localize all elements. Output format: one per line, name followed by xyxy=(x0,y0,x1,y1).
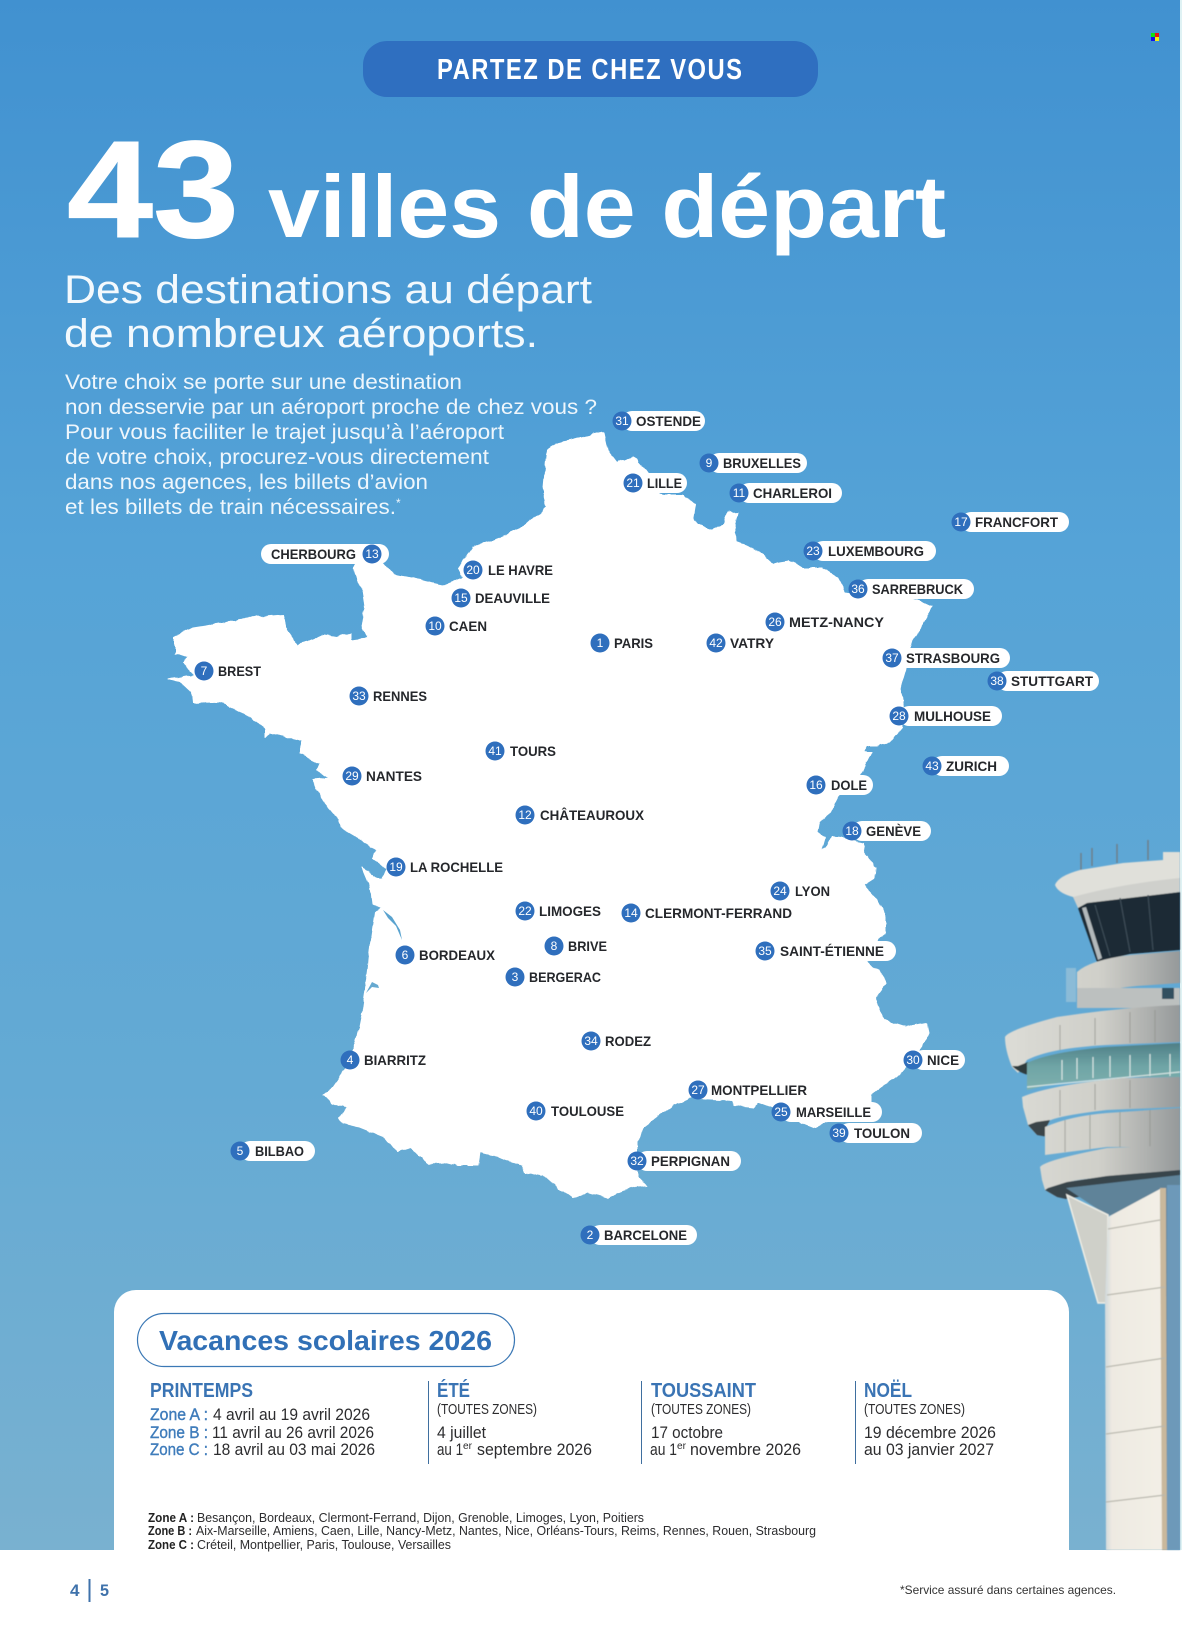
column: printemps: 4 avril au 19 avril 2026 xyxy=(213,1405,370,1424)
city label: Marseille: 25 xyxy=(774,1105,788,1119)
column: noël: au 03 janvier 2027 xyxy=(864,1440,994,1459)
city label: Strasbourg: STRASBOURG xyxy=(906,650,1000,666)
city label: Nantes: NANTES xyxy=(366,768,422,784)
city label: Cherbourg: CHERBOURG xyxy=(271,546,356,562)
city label: Toulon: TOULON xyxy=(854,1125,910,1141)
city label: Rennes: 33 xyxy=(352,689,366,703)
column: printemps: Zone B : xyxy=(150,1423,208,1442)
city label: Zurich xyxy=(922,756,1009,776)
city label: Luxembourg: LUXEMBOURG xyxy=(828,543,924,559)
column: toussaint: 17 octobre xyxy=(651,1423,723,1442)
city label: Strasbourg: 37 xyxy=(885,651,899,665)
city label: Dole: 16 xyxy=(809,778,823,792)
intro text block: de votre choix, procurez-vous directement xyxy=(65,446,489,469)
page numbers: 4 xyxy=(70,1581,80,1600)
city label: Sarrebruck xyxy=(848,579,974,599)
page numbers xyxy=(70,1579,109,1602)
title xyxy=(67,113,946,267)
city label: Tours: 41 xyxy=(488,744,502,758)
city label: Charleroi xyxy=(730,483,842,503)
city label: Montpellier xyxy=(688,1080,807,1100)
column: été: ÉTÉ xyxy=(437,1379,470,1402)
city label: Genève: 18 xyxy=(845,824,859,838)
city label: Barcelone xyxy=(580,1225,697,1245)
city label: Saint-Étienne xyxy=(756,941,896,961)
city label: Brive: 8 xyxy=(551,939,558,953)
city label: La Rochelle: 19 xyxy=(389,860,403,874)
column: printemps: PRINTEMPS xyxy=(150,1380,253,1402)
city label: Bordeaux: 6 xyxy=(402,948,409,962)
column: toussaint xyxy=(641,1380,801,1464)
zone city list: Zone B : xyxy=(148,1523,192,1538)
column: printemps: 11 avril au 26 avril 2026 xyxy=(212,1423,374,1442)
city label: Charleroi: 11 xyxy=(733,486,746,500)
column: toussaint: novembre 2026 xyxy=(690,1440,801,1459)
city label: Biarritz xyxy=(340,1050,426,1070)
city label: Vatry: VATRY xyxy=(730,635,775,651)
city label: Barcelone: 2 xyxy=(587,1228,594,1242)
heading: vacances scolaires 2026 xyxy=(138,1314,514,1366)
city label: Dole: DOLE xyxy=(831,777,867,793)
city label: Rodez: 34 xyxy=(584,1034,598,1048)
column: noël: 19 décembre 2026 xyxy=(864,1423,996,1442)
city label: Ostende xyxy=(612,411,705,431)
city label: Nice: 30 xyxy=(906,1053,920,1067)
city label: Montpellier: MONTPELLIER xyxy=(711,1082,807,1098)
subtitle xyxy=(64,268,592,356)
city label: Francfort: FRANCFORT xyxy=(975,514,1058,530)
city label: Ostende: OSTENDE xyxy=(636,413,701,429)
city label: Nantes: 29 xyxy=(345,769,359,783)
city label: Biarritz: 4 xyxy=(347,1053,354,1067)
city label: Châteauroux: 12 xyxy=(518,808,532,822)
city label: Stuttgart: STUTTGART xyxy=(1011,673,1093,689)
footnote: *Service assuré dans certaines agences. xyxy=(900,1583,1116,1597)
city label: Brive: BRIVE xyxy=(568,938,607,954)
city label: Paris xyxy=(590,634,653,652)
zone city list: Aix-Marseille, Amiens, Caen, Lille, Nancy-Metz, Nantes, Nice, Orléans-Tours, Reims, Rennes, Rouen, Strasbourg xyxy=(196,1523,816,1538)
column: toussaint: er xyxy=(677,1441,687,1452)
city label: Brest: 7 xyxy=(201,664,208,678)
city label: Brive xyxy=(544,936,607,956)
city label: Ostende: 31 xyxy=(615,414,629,428)
column: noël: (TOUTES ZONES) xyxy=(864,1402,965,1418)
heading pill: partez de chez vous xyxy=(363,41,818,97)
column: noël xyxy=(855,1379,996,1464)
city label: Brest xyxy=(194,662,261,680)
city label: Zurich: 43 xyxy=(925,759,939,773)
column: été: 4 juillet xyxy=(437,1423,486,1442)
city label: Bruxelles: 9 xyxy=(706,456,713,470)
column: toussaint: TOUSSAINT xyxy=(651,1380,756,1402)
city label: Lyon xyxy=(770,882,830,900)
city label: Mulhouse xyxy=(890,706,1002,726)
icon: colour marker xyxy=(1151,33,1159,41)
city label: Francfort: 17 xyxy=(954,515,968,529)
zone city list: Besançon, Bordeaux, Clermont-Ferrand, Dijon, Grenoble, Limoges, Lyon, Poitiers xyxy=(197,1510,644,1525)
city label: Perpignan: PERPIGNAN xyxy=(651,1153,730,1169)
column: toussaint: au 1 xyxy=(650,1440,677,1459)
city label: Le Havre: LE HAVRE xyxy=(488,562,553,578)
subtitle: de nombreux aéroports. xyxy=(64,312,538,356)
city label: Châteauroux xyxy=(516,806,645,824)
city label: Lyon: LYON xyxy=(795,883,830,899)
city label: Châteauroux: CHÂTEAUROUX xyxy=(540,806,645,823)
control tower xyxy=(1005,840,1180,1550)
city label: Sarrebruck: 36 xyxy=(851,582,865,596)
intro text block: * xyxy=(396,496,401,510)
zone city list: Zone A : xyxy=(148,1510,194,1525)
city label: Brest: BREST xyxy=(218,663,261,679)
intro text block: non desservie par un aéroport proche de chez vous ? xyxy=(65,396,597,419)
city label: Stuttgart: 38 xyxy=(990,674,1004,688)
city label: Bilbao: BILBAO xyxy=(255,1143,304,1159)
city label: Toulon: 39 xyxy=(832,1126,846,1140)
city label: Lille: LILLE xyxy=(647,475,682,491)
city label: Toulon xyxy=(830,1123,922,1143)
city label: Rennes xyxy=(350,686,427,706)
city label: Barcelone: BARCELONE xyxy=(604,1227,687,1243)
city label: Paris: PARIS xyxy=(614,635,653,651)
city label: Genève xyxy=(842,821,931,841)
city label: Saint-Étienne: 35 xyxy=(758,944,772,958)
heading pill: partez de chez vous: PARTEZ DE CHEZ VOUS xyxy=(437,53,742,86)
city label: Dole xyxy=(806,775,873,795)
city label: Rennes: RENNES xyxy=(373,688,427,704)
column: printemps: 18 avril au 03 mai 2026 xyxy=(213,1440,375,1459)
city label: Caen: CAEN xyxy=(449,618,487,634)
city label: Mulhouse: MULHOUSE xyxy=(914,708,991,724)
intro text block: Pour vous faciliter le trajet jusqu’à l’aéroport xyxy=(65,421,504,444)
city label: Zurich: ZURICH xyxy=(946,758,997,774)
city label: Marseille: MARSEILLE xyxy=(796,1104,871,1120)
city label: Perpignan xyxy=(628,1151,741,1171)
city label: Stuttgart xyxy=(988,671,1099,691)
city label: Luxembourg xyxy=(804,541,936,561)
city label: Genève: GENÈVE xyxy=(866,823,921,839)
city label: Toulouse xyxy=(526,1102,624,1120)
city label: Le Havre: 20 xyxy=(466,563,480,577)
city label: Tours: TOURS xyxy=(510,743,556,759)
column: noël: NOËL xyxy=(864,1379,912,1402)
city label: Clermont-Ferrand: CLERMONT-FERRAND xyxy=(645,905,792,921)
city label: Francfort xyxy=(952,512,1069,532)
map of France xyxy=(168,432,932,1198)
column: été: (TOUTES ZONES) xyxy=(437,1402,537,1418)
column: printemps: Zone C : xyxy=(150,1440,208,1459)
city label: Bruxelles: BRUXELLES xyxy=(723,455,801,471)
city label: Limoges: 22 xyxy=(518,904,532,918)
city label: Deauville xyxy=(452,588,550,608)
intro text block: Votre choix se porte sur une destination xyxy=(65,371,462,394)
city label: Bilbao xyxy=(230,1141,315,1161)
city label: Caen xyxy=(426,616,487,636)
column: toussaint: (TOUTES ZONES) xyxy=(651,1402,751,1418)
city label: Vatry: 42 xyxy=(709,636,723,650)
city label: Charleroi: CHARLEROI xyxy=(753,485,832,501)
city label: Toulouse: TOULOUSE xyxy=(551,1103,624,1119)
city label: Lille xyxy=(624,473,687,493)
city label: Paris: 1 xyxy=(597,636,604,650)
city label: Deauville: 15 xyxy=(454,591,468,605)
city label: La Rochelle: LA ROCHELLE xyxy=(410,859,503,875)
page numbers: 5 xyxy=(100,1581,109,1600)
city label: Nice: NICE xyxy=(927,1052,959,1068)
city label: Bergerac: BERGERAC xyxy=(529,969,601,985)
city label: Saint-Étienne: SAINT-ÉTIENNE xyxy=(780,943,884,959)
column: printemps xyxy=(150,1380,375,1459)
city label: Cherbourg xyxy=(261,544,389,564)
intro text block: dans nos agences, les billets d’avion xyxy=(65,471,428,494)
column: été xyxy=(428,1379,592,1464)
city label: Bilbao: 5 xyxy=(237,1144,244,1158)
column: été: er xyxy=(463,1441,473,1452)
city label: Toulouse: 40 xyxy=(529,1104,543,1118)
column: printemps: Zone A : xyxy=(150,1405,208,1424)
city label: Rodez xyxy=(582,1032,651,1050)
city label: Cherbourg: 13 xyxy=(365,547,379,561)
title: villes de départ xyxy=(268,157,946,256)
city label: Perpignan: 32 xyxy=(630,1154,644,1168)
city label: Metz-Nancy: METZ-NANCY xyxy=(789,614,885,630)
city label: Tours xyxy=(486,742,556,760)
city label: Lyon: 24 xyxy=(773,884,787,898)
city label: Limoges xyxy=(516,902,601,920)
city label: Lille: 21 xyxy=(626,476,640,490)
city label: Clermont-Ferrand: 14 xyxy=(624,906,638,920)
heading: vacances scolaires 2026: Vacances scolaires 2026 xyxy=(159,1325,492,1356)
city label: Deauville: DEAUVILLE xyxy=(475,590,550,606)
city label: La Rochelle xyxy=(386,858,503,876)
city label: Montpellier: 27 xyxy=(691,1083,705,1097)
column: été: au 1 xyxy=(437,1440,463,1459)
city label: Bergerac: 3 xyxy=(512,970,519,984)
city label: Le Havre xyxy=(464,560,553,580)
intro text block: et les billets de train nécessaires. xyxy=(65,496,396,519)
city label: Caen: 10 xyxy=(428,619,442,633)
zone city list: Zone C : xyxy=(148,1537,194,1552)
city label: Bruxelles xyxy=(700,453,807,473)
city label: Bergerac xyxy=(506,968,601,986)
city label: Nantes xyxy=(342,766,422,786)
city label: Metz-Nancy xyxy=(766,612,885,632)
zone city list xyxy=(148,1510,816,1552)
zone city list: Créteil, Montpellier, Paris, Toulouse, Versailles xyxy=(197,1537,451,1552)
city label: Sarrebruck: SARREBRUCK xyxy=(872,581,963,597)
city label: Metz-Nancy: 26 xyxy=(768,615,782,629)
title: 43 xyxy=(67,113,239,267)
city label: Marseille xyxy=(772,1102,882,1122)
panel: school holidays xyxy=(114,1290,1069,1552)
city label: Mulhouse: 28 xyxy=(892,709,906,723)
column: été: septembre 2026 xyxy=(477,1440,592,1459)
intro text block xyxy=(65,371,597,519)
city label: Vatry xyxy=(706,634,775,652)
city label: Rodez: RODEZ xyxy=(605,1033,651,1049)
city label: Strasbourg xyxy=(882,648,1010,668)
subtitle: Des destinations au départ xyxy=(64,268,592,312)
city label: Nice xyxy=(904,1050,965,1070)
city label: Bordeaux xyxy=(396,946,496,964)
city label: Bordeaux: BORDEAUX xyxy=(419,947,496,963)
city label: Limoges: LIMOGES xyxy=(539,903,601,919)
city label: Biarritz: BIARRITZ xyxy=(364,1052,426,1068)
city label: Luxembourg: 23 xyxy=(806,544,820,558)
